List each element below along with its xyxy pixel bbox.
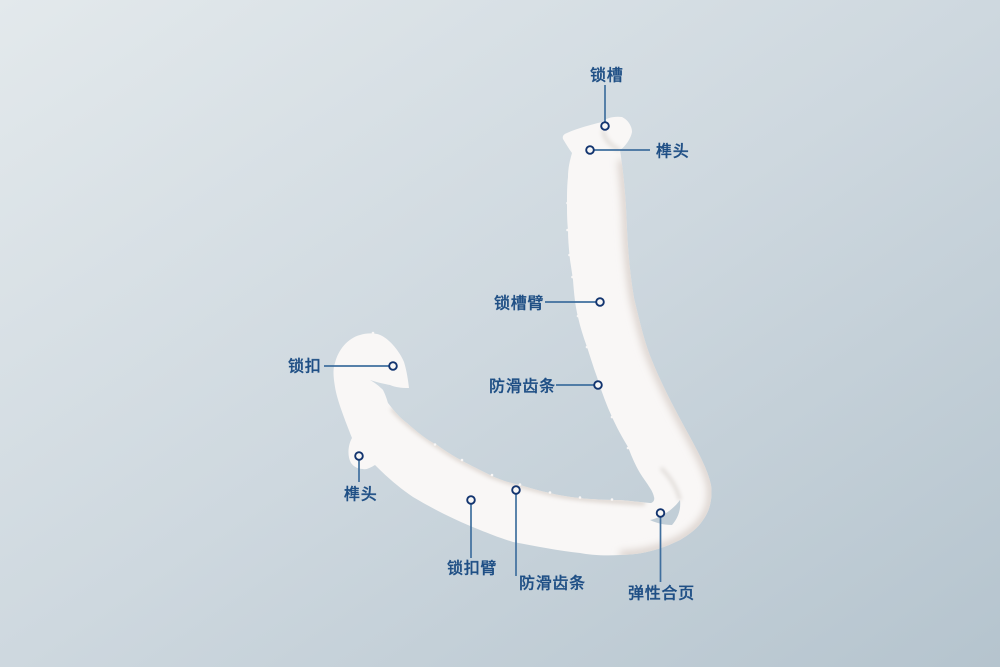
- callout: 榫头 (knob): [344, 452, 377, 504]
- callout: 榫头 (top): [586, 142, 689, 160]
- hinge gap: [650, 500, 680, 525]
- clip body: [334, 117, 712, 555]
- callout: 榫头 (top): 榫头: [656, 142, 689, 160]
- callout: 防滑齿条 (lower arm): [512, 486, 586, 592]
- callout: 弹性合页: [628, 509, 695, 602]
- callout: 锁槽臂: 锁槽臂: [494, 294, 544, 312]
- callout: 防滑齿条 (arm): [489, 378, 602, 396]
- soft shading: [392, 130, 712, 555]
- anti-slip teeth: [372, 202, 629, 501]
- callout: 锁扣臂: 锁扣臂: [447, 560, 497, 578]
- product: lock clip: [334, 117, 712, 555]
- callout: 锁槽: 锁槽: [590, 66, 623, 84]
- callout: 锁槽: [590, 66, 623, 130]
- callout: 弹性合页: 弹性合页: [628, 584, 695, 602]
- callout: 锁扣: 锁扣: [288, 358, 321, 376]
- callout: 防滑齿条 (arm): 防滑齿条: [489, 378, 556, 396]
- callout: 防滑齿条 (lower arm): 防滑齿条: [519, 574, 586, 592]
- callout: 锁扣: [288, 358, 397, 376]
- callout: 榫头 (knob): 榫头: [344, 486, 377, 504]
- callout: 锁扣臂: [447, 496, 497, 578]
- callout: 锁槽臂: [494, 294, 604, 312]
